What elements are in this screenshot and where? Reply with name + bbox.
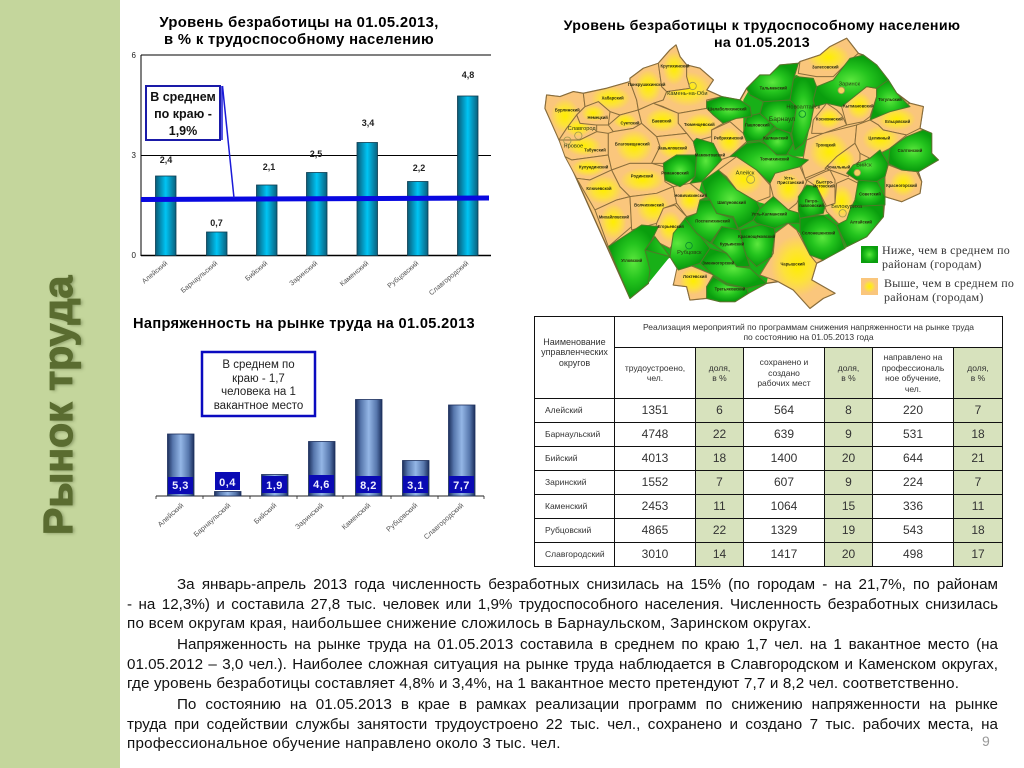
bar chart: labour market tension: Алейский	[156, 501, 185, 529]
map city labels: Рубцовск	[677, 250, 702, 256]
callout: regional average 1.9%	[146, 86, 220, 140]
bar chart: labour market tension: 3,1	[407, 480, 424, 492]
bar chart: unemployment rate: 2,4	[160, 155, 172, 165]
data table: округов	[559, 358, 590, 368]
data table: 498	[903, 547, 923, 561]
data table: в %	[712, 373, 727, 383]
data table: Заринский	[545, 477, 586, 487]
data table: по состоянию на 01.05.2013 года	[743, 332, 874, 342]
legend swatch: above average	[861, 278, 878, 295]
bar chart: unemployment rate: 2,1	[263, 162, 275, 172]
data table: 4865	[642, 523, 668, 537]
map district labels: Третьяковский	[715, 287, 746, 292]
map district labels: Петро-	[805, 199, 819, 204]
map district labels: Целинный	[868, 135, 891, 140]
map city labels: Барнаул	[769, 116, 795, 123]
map district labels: Романовский	[661, 171, 689, 176]
data table: 20	[842, 547, 855, 561]
data table: 6	[716, 403, 723, 417]
data table: 20	[842, 451, 855, 465]
title: unemployment chart: в % к трудоспособному населению	[164, 32, 434, 48]
map district labels: Зональный	[826, 164, 851, 169]
data table: 1351	[642, 403, 668, 417]
map district labels: Егорьевский	[657, 224, 684, 229]
legend text: below average: районам (городам)	[882, 257, 982, 271]
legend swatch: below average	[861, 246, 878, 263]
data table: в %	[971, 373, 985, 383]
map district labels: Усть-Калманский	[752, 211, 787, 216]
data table: 7	[975, 475, 981, 489]
map city labels: Славгород	[568, 126, 596, 132]
map district labels: Ключевской	[586, 186, 612, 191]
data table: 3010	[642, 547, 668, 561]
map district labels: Родинский	[631, 174, 654, 179]
map district labels: Залесовский	[812, 65, 839, 70]
data table: 15	[842, 499, 855, 513]
text block: programme results: По состоянию на 01.05.2013 в крае в рамках реализации программ по снижению напряженности на рынке	[177, 696, 998, 713]
data table: ное обучение,	[885, 373, 941, 383]
map district labels: Змеиногорский	[702, 260, 735, 265]
page number: 9	[982, 733, 990, 749]
bar chart: unemployment rate: Заринский	[288, 259, 319, 288]
sidebar panel	[0, 0, 120, 768]
data table: 19	[842, 523, 855, 537]
map districts	[545, 38, 938, 308]
map district labels: Ребрихинский	[714, 135, 744, 140]
map district labels: Панкрушихинский	[628, 82, 666, 87]
data table: 224	[903, 475, 923, 489]
data table: Каменский	[545, 501, 587, 511]
text block: tension summary	[127, 636, 998, 692]
map city labels: Белокуриха	[831, 204, 863, 210]
map district labels: Калманский	[763, 136, 789, 141]
map district labels: Павловский	[745, 122, 770, 127]
callout: average tension 1.7: человека на 1	[221, 386, 296, 398]
bar chart: labour market tension	[156, 400, 484, 541]
map district labels: Шипуновский	[717, 200, 746, 205]
text block: programme results	[127, 696, 998, 752]
bar chart: unemployment rate: 0,7	[210, 218, 223, 228]
data table: направлено на	[884, 352, 942, 362]
data table: Рубцовский	[545, 525, 591, 535]
title: unemployment chart: Уровень безработицы на 01.05.2013,	[159, 15, 439, 31]
data table: 644	[903, 451, 923, 465]
bar chart: labour market tension: 5,3	[172, 480, 189, 492]
map district labels: Поспелихинский	[695, 219, 730, 224]
map base silhouette	[545, 38, 938, 308]
map city labels: Камень-на-Оби	[667, 91, 708, 97]
data table: 336	[903, 499, 923, 513]
data table: 220	[903, 403, 923, 417]
map city labels: Бийск	[856, 162, 872, 169]
bar chart: unemployment rate: Славгородский	[427, 259, 470, 297]
legend text: below average: Ниже, чем в среднем по	[882, 243, 1010, 257]
map district labels: Солонешенский	[802, 231, 836, 236]
text block: programme results: труда при содействии службы занятости трудоустроено 22 тыс. чел., сохранено и создано 7 тыс. рабочих места, на	[127, 716, 998, 732]
data table: 8	[845, 403, 852, 417]
data table: 17	[971, 547, 985, 561]
map city markers	[564, 82, 861, 249]
data table: 18	[971, 427, 985, 441]
map district labels: Топчихинский	[760, 157, 790, 162]
bar chart: labour market tension: Каменский	[340, 501, 372, 531]
data table: Славгородский	[545, 549, 605, 559]
data table: доля,	[709, 362, 730, 372]
data table: 1400	[771, 451, 797, 465]
bar chart: unemployment rate: 6	[132, 51, 137, 60]
bar chart: unemployment rate: Рубцовский	[386, 259, 420, 290]
data table: трудоустроено,	[625, 362, 685, 372]
data table: рабочих мест	[757, 378, 811, 388]
map district labels: Бурлинский	[555, 108, 580, 113]
data table: чел.	[905, 384, 921, 394]
text block: unemployment summary: За январь-апрель 2013 года численность безработных снизилась на 15% (по городам - на 21,7%, по районам	[177, 576, 998, 593]
bar chart: labour market tension: Бийский	[252, 501, 278, 526]
data table: 21	[971, 451, 985, 465]
callout: average tension 1.7: В среднем по	[222, 359, 295, 371]
bar chart: labour market tension: Славгородский	[422, 501, 465, 541]
map district labels: Кытмановский	[843, 104, 874, 109]
bar chart: unemployment rate: 2,5	[310, 149, 322, 159]
data table: 11	[972, 499, 984, 513]
bar chart: unemployment rate: 4,8	[462, 70, 474, 80]
callout: average tension 1.7: краю - 1,7	[232, 373, 285, 385]
data table: 1417	[771, 547, 797, 561]
map city labels: Яровое	[564, 144, 583, 150]
title: map: Уровень безработицы к трудоспособному населению	[564, 18, 960, 34]
legend text: below average	[882, 243, 1010, 271]
map district labels: Краснощёковский	[738, 234, 776, 239]
data table: 1064	[771, 499, 797, 513]
map district labels: Волчихинский	[634, 203, 664, 208]
data table: Бийский	[545, 453, 578, 463]
map district labels: Кулундинский	[579, 164, 609, 169]
data table: доля,	[838, 362, 859, 372]
callout: regional average 1.9%: 1,9%	[169, 124, 197, 138]
data table	[534, 316, 1003, 567]
map district labels: Благовещенский	[615, 142, 650, 147]
legend text: above average: районам (городам)	[884, 290, 984, 304]
bar chart: unemployment rate: Алейский	[140, 259, 169, 285]
map district labels: Чарышский	[780, 261, 805, 266]
map district labels: Новичихинский	[674, 193, 707, 198]
data table: 18	[971, 523, 985, 537]
bar chart: labour market tension: 7,7	[453, 480, 470, 492]
callout: regional average 1.9%: В среднем	[150, 90, 216, 104]
text block: tension summary: Напряженность на рынке труда на 01.05.2013 составила в среднем по краю 1,7 чел. на 1 вакантное место (на	[177, 636, 998, 653]
sidebar heading: Рынок труда	[35, 276, 81, 535]
data table: 22	[713, 523, 726, 537]
data table: создано	[768, 368, 800, 378]
callout: regional average 1.9%: по краю -	[154, 107, 212, 121]
map district labels: Тюменцевский	[684, 122, 715, 127]
bar chart: labour market tension: 1,9	[266, 480, 283, 492]
map city labels: Алейск	[736, 169, 755, 176]
data table: доля,	[967, 362, 989, 372]
map district labels: Красногорский	[886, 183, 918, 188]
bar chart: unemployment rate: 3,4	[362, 118, 374, 128]
data table: 7	[975, 403, 981, 417]
map district labels: Немецкий	[587, 115, 608, 120]
callout: average tension 1.7: вакантное место	[214, 400, 303, 412]
map district labels: Баевский	[652, 119, 672, 124]
data table: чел.	[647, 373, 663, 383]
map district labels: Косихинский	[816, 116, 843, 121]
callout: average tension 1.7	[202, 352, 315, 416]
title: tension chart: Напряженность на рынке труда на 01.05.2013	[133, 316, 475, 332]
data table: 1552	[642, 475, 668, 489]
map district labels: Завьяловский	[658, 145, 688, 150]
data table: 543	[903, 523, 923, 537]
data table: 9	[845, 427, 852, 441]
bar chart: labour market tension: Барнаульский	[192, 501, 232, 539]
map district labels: Ельцовский	[885, 119, 911, 124]
map district labels: Хабарский	[602, 96, 624, 101]
data table: 2453	[642, 499, 668, 513]
bar chart: unemployment rate: 0	[132, 251, 137, 260]
map city labels: Новоалтайск	[786, 103, 821, 110]
data table: профессиональ	[882, 362, 944, 372]
bar chart: labour market tension: 0,4	[219, 477, 236, 489]
map district labels: Солтонский	[898, 148, 923, 153]
map district labels: Мамонтовский	[695, 153, 726, 158]
text block: unemployment summary	[127, 576, 998, 632]
map district labels: Троицкий	[816, 142, 836, 147]
map district labels: Истокский	[813, 184, 835, 189]
map district labels: павловский	[799, 203, 824, 208]
map district labels: Крутихинский	[661, 64, 690, 69]
map district labels: Усть-	[784, 176, 795, 181]
data table: сохранено и	[760, 357, 808, 367]
data table: 4013	[642, 451, 668, 465]
data table: Барнаульский	[545, 429, 600, 439]
map of districts	[545, 38, 938, 308]
bar chart: unemployment rate: 2,2	[413, 163, 425, 173]
map district labels	[555, 64, 923, 292]
data table: 607	[774, 475, 794, 489]
map city labels	[564, 81, 872, 256]
title: map	[564, 18, 960, 51]
map district labels: Тогульский	[878, 97, 902, 102]
text block: tension summary: где уровень безработицы составляет 4,8% и 3,4%, на 1 вакантное место претендуют 7,7 и 8,2 чел. соответственно.	[127, 675, 959, 692]
bar chart: labour market tension: 4,6	[313, 479, 330, 491]
bar chart: labour market tension: Заринский	[293, 501, 325, 531]
text block: unemployment summary: - на 12,3%) и составила 27,8 тыс. человек или 1,9% трудоспособного населения. Численность безработных снизилась	[127, 596, 998, 612]
bar chart: unemployment rate: Барнаульский	[179, 259, 219, 295]
title: map: на 01.05.2013	[714, 35, 810, 51]
data table: в %	[841, 373, 856, 383]
map district labels: Михайловский	[599, 215, 630, 220]
text block: tension summary: 01.05.2012 – 3,0 чел.). Наиболее сложная ситуация на рынке труда наблюдается в Славгородском и Каменском округах,	[127, 656, 998, 672]
text block: programme results: профессиональное обучение направлено около 3 тыс. чел.	[127, 735, 561, 752]
map district labels: Советский	[859, 192, 881, 197]
data table: 9	[845, 475, 852, 489]
map district labels: Пристанский	[777, 180, 804, 185]
map district labels: Угловский	[621, 258, 643, 263]
map district labels: Быстро-	[816, 179, 834, 184]
bar chart: labour market tension: Рубцовский	[384, 501, 419, 534]
map district labels: Шелаболихинский	[708, 106, 747, 111]
data table: 18	[713, 451, 726, 465]
map district labels: Алтайский	[850, 219, 872, 224]
data table: 4748	[642, 427, 668, 441]
data table: 564	[774, 403, 794, 417]
map district labels: Курьинский	[720, 242, 745, 247]
map district labels: Локтевский	[683, 274, 707, 279]
data table: 11	[713, 499, 726, 513]
map district labels: Суетский	[620, 121, 640, 126]
average line	[141, 86, 489, 200]
text block: unemployment summary: по всем округам края, наибольшее снижение сложилось в Барнаульском, Заринском округах.	[127, 615, 811, 632]
data table: 14	[713, 547, 726, 561]
data table: 1329	[771, 523, 797, 537]
data table: управленческих	[541, 347, 608, 357]
legend text: above average: Выше, чем в среднем по	[884, 276, 1014, 290]
bar chart: unemployment rate: Бийский	[244, 259, 269, 283]
data table: 531	[903, 427, 923, 441]
data table: 7	[716, 475, 723, 489]
data table: 639	[774, 427, 794, 441]
data table: Наименование	[543, 336, 606, 346]
data table: 22	[713, 427, 726, 441]
data table: Алейский	[545, 405, 583, 415]
legend text: above average	[884, 276, 1014, 304]
bar chart: unemployment rate: Каменский	[338, 259, 370, 288]
bar chart: unemployment rate	[132, 51, 491, 297]
map city labels: Заринск	[839, 81, 860, 87]
map district labels: Табунский	[584, 148, 606, 153]
bar chart: unemployment rate: 3	[132, 151, 137, 160]
data table: Реализация мероприятий по программам снижения напряженности на рынке труда	[643, 322, 974, 332]
title: unemployment chart	[159, 15, 439, 48]
bar chart: labour market tension: 8,2	[360, 480, 377, 492]
map district labels: Тальменский	[760, 85, 787, 90]
